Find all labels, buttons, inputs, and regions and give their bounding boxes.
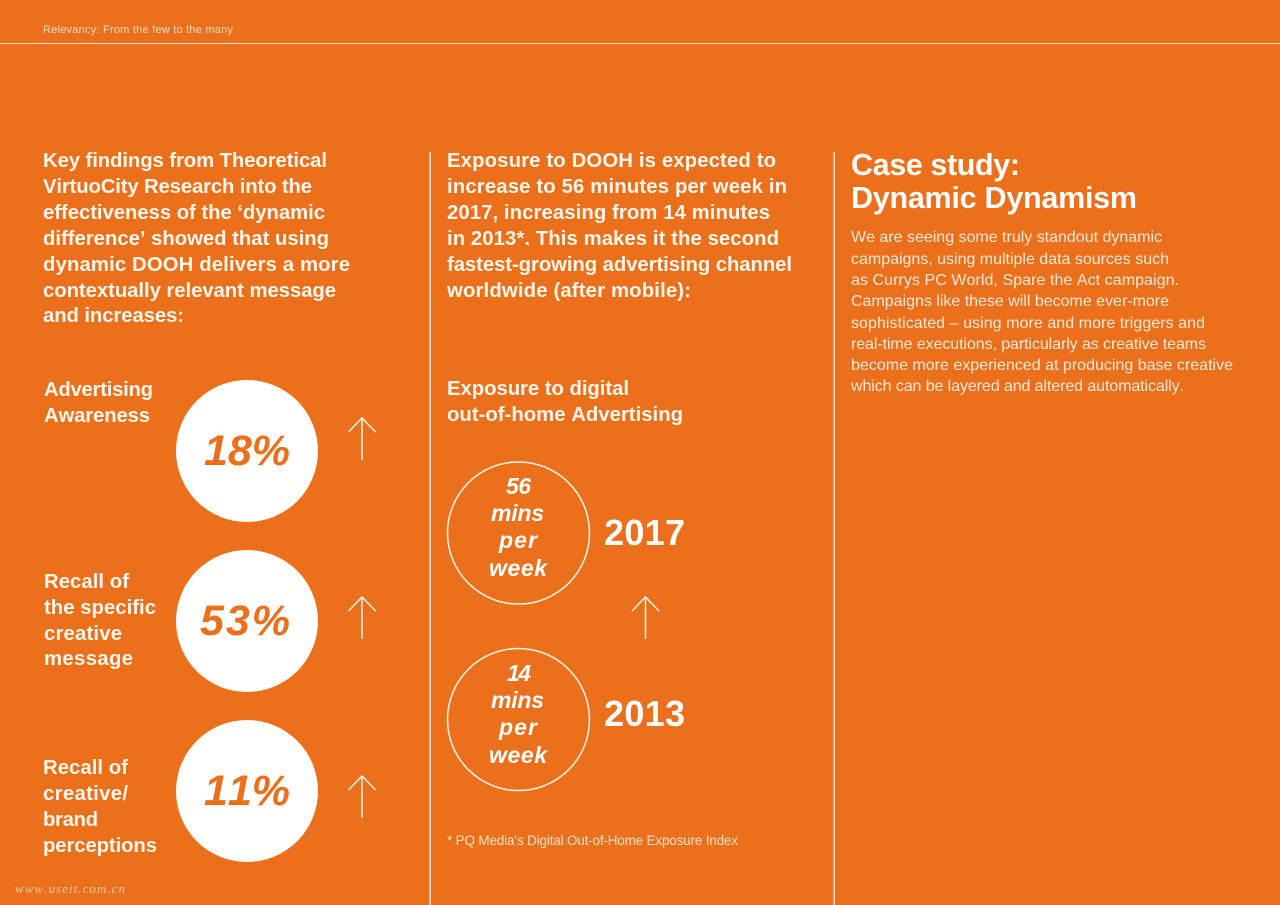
text block: exposure to DOOH intro xyxy=(446,150,792,302)
text block: key findings intro: and increases: xyxy=(43,305,184,327)
label: recall of creative/brand perceptions xyxy=(43,757,157,857)
heading: case study xyxy=(851,148,1137,215)
text block: key findings intro: dynamic DOOH delivers a more xyxy=(43,254,350,276)
text block: case study body: We are seeing some truly standout dynamic xyxy=(851,229,1162,246)
text block: case study body: as Currys PC World, Spare the Act campaign. xyxy=(851,272,1179,289)
circle: 14 mins per week: mins xyxy=(491,687,544,713)
text block: key findings intro: contextually relevant message xyxy=(43,280,336,302)
text block: case study body: Campaigns like these will become ever-more xyxy=(851,293,1169,310)
circle: 14 mins per week: week xyxy=(489,742,548,768)
label: recall of the specific creative message: Recall of xyxy=(44,571,129,593)
text block: case study body: which can be layered and altered automatically. xyxy=(850,378,1184,395)
text block: key findings intro: difference’ showed that using xyxy=(43,228,329,250)
circle: 14 mins per week: per xyxy=(498,714,538,740)
circle: 53% xyxy=(176,550,318,692)
text block: case study body: campaigns, using multiple data sources such xyxy=(851,251,1169,268)
text block: case study body: real-time executions, particularly as creative teams xyxy=(851,336,1206,353)
chart heading: exposure to digital out-of-home advertising xyxy=(447,378,683,426)
heading: case study: Case study: xyxy=(851,148,1020,182)
circle: 14 mins per week xyxy=(448,648,590,790)
stat row: recall of creative/brand perceptions xyxy=(43,720,376,862)
stat row: advertising awareness xyxy=(44,379,376,522)
year label: 2013: 2013 xyxy=(604,693,685,734)
stat row: recall of specific creative message xyxy=(44,550,376,692)
label: recall of the specific creative message: creative xyxy=(44,623,122,645)
label: recall of the specific creative message xyxy=(44,571,156,670)
heading: case study: Dynamic Dynamism xyxy=(851,181,1137,215)
text block: exposure to DOOH intro: 2017, increasing from 14 minutes xyxy=(447,202,770,224)
circle: 18%: 18% xyxy=(204,427,290,475)
text block: key findings intro xyxy=(43,150,350,327)
icon: up arrow xyxy=(348,776,376,818)
icon: up arrow between years xyxy=(632,597,659,639)
footnote: * PQ Media’s Digital Out-of-Home Exposure Index xyxy=(447,833,738,848)
text block: exposure to DOOH intro: Exposure to DOOH is expected to xyxy=(447,150,776,172)
icon: up arrow xyxy=(348,418,376,460)
text block: exposure to DOOH intro: in 2013*. This makes it the second xyxy=(447,228,779,250)
circle: 56 mins per week xyxy=(448,462,590,604)
label: advertising awareness: Awareness xyxy=(44,405,150,427)
watermark: www.useit.com.cn xyxy=(15,881,125,896)
circle: 14 mins per week: 14 xyxy=(507,660,531,686)
circle: 53%: 53% xyxy=(200,597,290,645)
year label: 2017: 2017 xyxy=(604,512,685,553)
label: recall of the specific creative message: the specific xyxy=(44,597,156,619)
label: recall of creative/brand perceptions: Recall of xyxy=(43,757,128,779)
text block: case study body: become more experienced at producing base creative xyxy=(851,357,1233,374)
text block: exposure to DOOH intro: increase to 56 minutes per week in xyxy=(447,176,787,198)
chart heading: exposure to digital out-of-home advertising: out-of-home Advertising xyxy=(447,404,683,426)
label: recall of creative/brand perceptions: perceptions xyxy=(43,835,157,857)
header text: Relevancy: From the few to the many xyxy=(43,24,234,36)
circle: 56 mins per week: week xyxy=(489,555,548,581)
circle: 11%: 11% xyxy=(204,767,290,815)
label: recall of creative/brand perceptions: creative/ xyxy=(43,783,128,805)
circle: 18% xyxy=(176,380,318,522)
label: recall of the specific creative message: message xyxy=(44,648,133,670)
icon: up arrow xyxy=(348,597,376,639)
circle: 56 mins per week: 56 xyxy=(506,473,531,499)
circle: 11% xyxy=(176,720,318,862)
label: advertising awareness: Advertising xyxy=(44,379,153,401)
text block: key findings intro: Key findings from Theoretical xyxy=(43,150,327,172)
text block: case study body xyxy=(850,229,1233,395)
text block: exposure to DOOH intro: worldwide (after mobile): xyxy=(446,280,691,302)
text block: key findings intro: VirtuoCity Research into the xyxy=(43,176,312,198)
label: recall of creative/brand perceptions: brand xyxy=(43,809,98,831)
circle: 56 mins per week: per xyxy=(498,527,538,553)
circle: 56 mins per week: mins xyxy=(491,500,544,526)
text block: exposure to DOOH intro: fastest-growing advertising channel xyxy=(447,254,792,276)
label: advertising awareness xyxy=(44,379,153,427)
chart heading: exposure to digital out-of-home advertising: Exposure to digital xyxy=(447,378,629,400)
text block: case study body: sophisticated – using more and more triggers and xyxy=(851,315,1205,332)
text block: key findings intro: effectiveness of the ‘dynamic xyxy=(43,202,325,224)
